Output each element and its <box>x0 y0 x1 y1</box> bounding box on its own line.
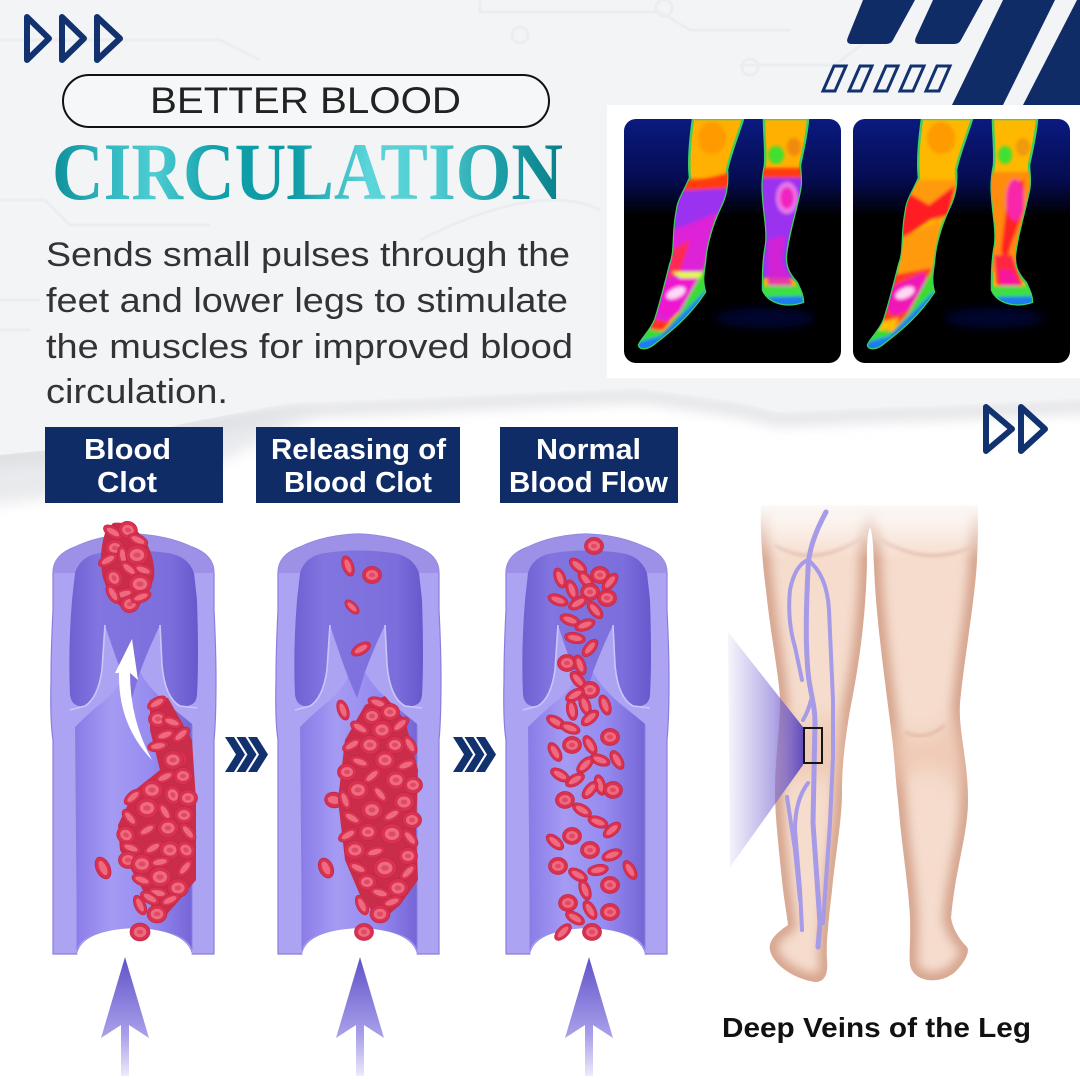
description text: Sends small pulses through the <box>46 236 570 274</box>
chevrons: step one to two <box>225 737 268 772</box>
scattered cells <box>543 538 640 943</box>
thermal image: after <box>853 119 1070 363</box>
description text: feet and lower legs to stimulate <box>46 282 568 320</box>
description text <box>46 236 573 411</box>
label: releasing of blood clot <box>256 427 460 503</box>
chevrons: step two to three <box>453 737 496 772</box>
decoration: small outlined parallelograms <box>823 66 950 91</box>
clot <box>336 694 422 923</box>
label: blood clot: Clot <box>97 467 157 499</box>
white curved flow arrow <box>115 639 152 760</box>
marker box <box>804 728 822 763</box>
vein diagram: releasing of blood clot <box>276 534 441 954</box>
illustration: legs with deep veins <box>728 500 990 982</box>
label: normal blood flow: Normal <box>536 434 641 466</box>
heading pill: better blood: BETTER BLOOD <box>150 80 461 121</box>
description text: the muscles for improved blood <box>46 328 573 366</box>
detached clot <box>96 519 155 615</box>
label: releasing of blood clot: Blood Clot <box>284 467 432 499</box>
arrow: flow direction one <box>101 957 149 1076</box>
label: normal blood flow <box>500 427 678 503</box>
magnifier cone <box>728 632 803 867</box>
icon: triple triangle arrows <box>27 17 120 60</box>
icon: double triangle arrows <box>986 407 1045 451</box>
arrow: flow direction two <box>336 957 384 1076</box>
heading pill: better blood <box>63 75 549 127</box>
label: releasing of blood clot: Releasing of <box>271 434 446 466</box>
arrow: flow direction three <box>565 957 613 1076</box>
thermal image: before <box>624 119 841 363</box>
vein diagram: blood clot <box>51 519 216 954</box>
description text: circulation. <box>46 373 228 411</box>
caption: deep veins of the leg: Deep Veins of the Leg <box>722 1012 1031 1043</box>
veins <box>787 512 833 947</box>
decoration: navy slanted stripes <box>847 0 1080 105</box>
lower clot <box>114 693 199 922</box>
legs <box>760 506 978 982</box>
vein diagram: normal blood flow <box>504 534 669 954</box>
panel: thermal images <box>607 105 1080 378</box>
label: blood clot: Blood <box>84 434 171 466</box>
title: circulation: CIRCULATION <box>52 126 563 217</box>
label: blood clot <box>45 427 223 503</box>
label: normal blood flow: Blood Flow <box>509 467 668 499</box>
scattered cells <box>315 554 382 940</box>
